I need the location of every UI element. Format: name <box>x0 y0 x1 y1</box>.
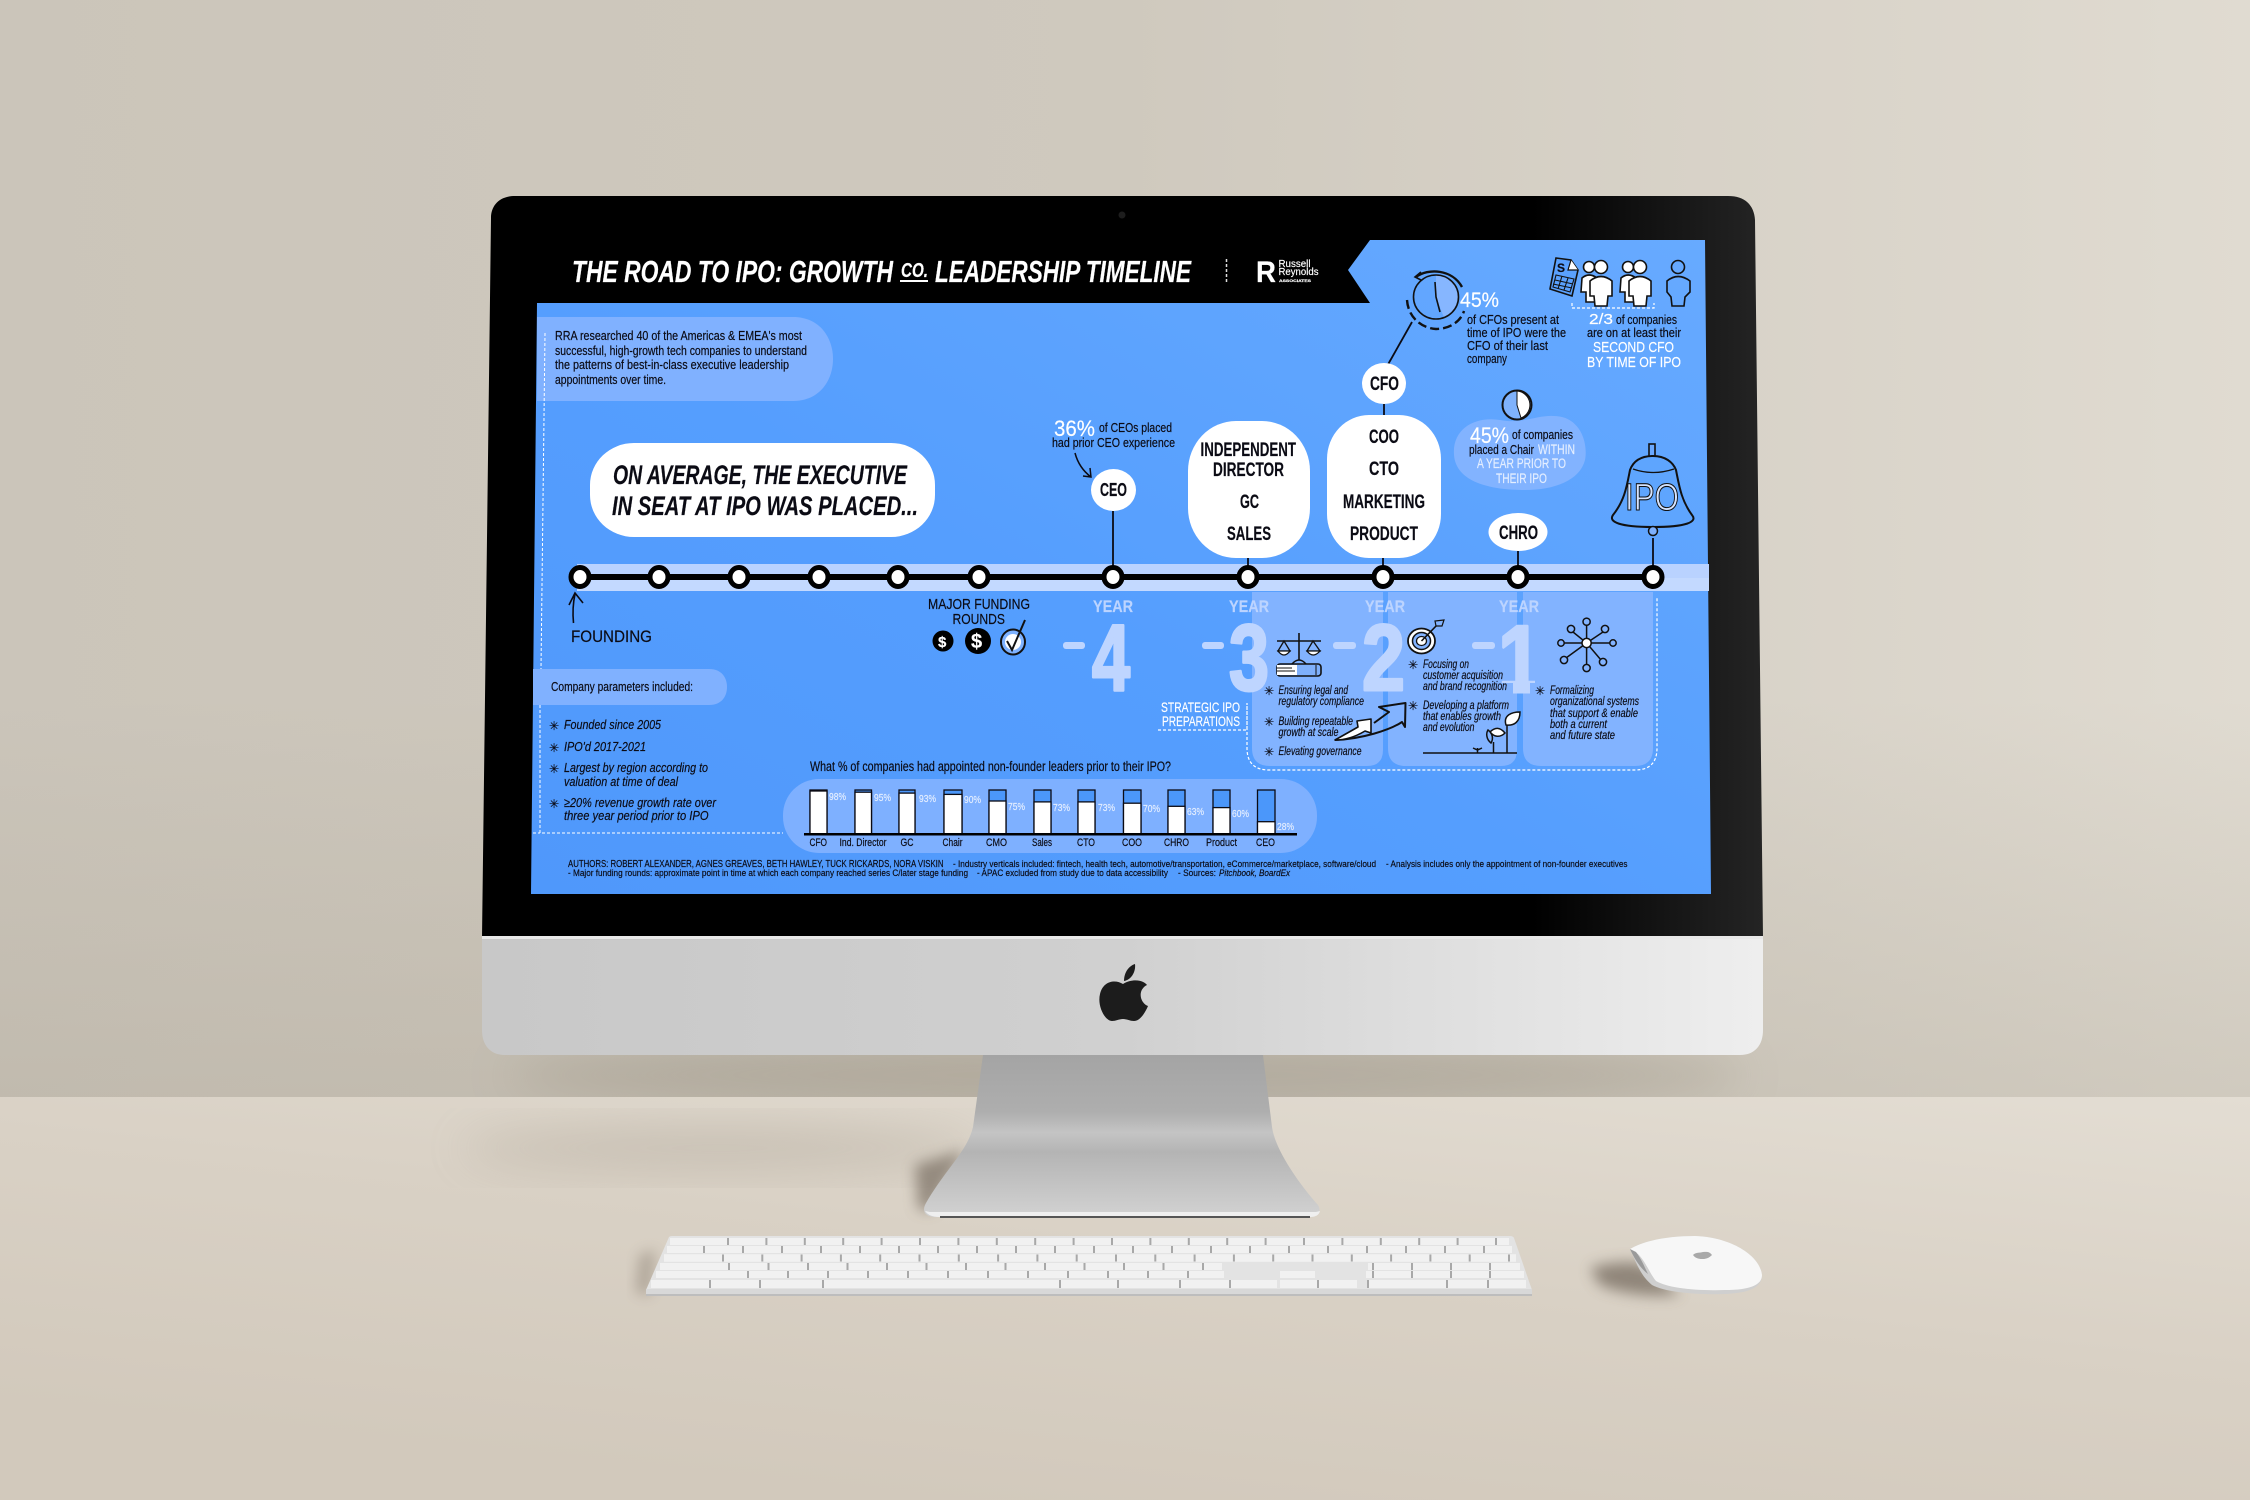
text: year -2 bullets <box>1408 658 1509 734</box>
callout: 2/3 of companies: BY TIME OF IPO <box>1587 354 1681 371</box>
text: authors and footnotes: - Industry verticals included: fintech, health tech, automotive/transportation, eCommerce/marketplace, software/cloud <box>953 859 1376 870</box>
panel: 45% chair blob: of companies <box>1512 428 1573 442</box>
text: authors and footnotes: - Analysis includes only the appointment of non-founder executives <box>1386 859 1628 870</box>
bar chart: COO <box>1122 837 1142 849</box>
year minus 2: 2 <box>1362 605 1405 710</box>
bar chart: 63% <box>1187 806 1204 818</box>
icon: first funding dollar <box>932 630 954 652</box>
text: year -2 bullets: that enables growth <box>1423 711 1501 723</box>
bar chart: 98% <box>829 791 846 803</box>
panel: study intro: appointments over time. <box>555 373 666 387</box>
text: year -1 bullets: that support & enable <box>1550 708 1638 720</box>
bar chart: 60% <box>1232 808 1249 820</box>
background: desk <box>0 1097 2250 1500</box>
panel: 45% chair blob: 45% <box>1470 423 1509 448</box>
callout: 45% of CFOs: 45% <box>1460 289 1499 312</box>
year minus 2: YEAR <box>1365 597 1405 616</box>
bubble: CEO <box>1091 469 1136 511</box>
year minus 3: 3 <box>1229 605 1269 710</box>
bar chart: Sales <box>1032 837 1052 849</box>
bar chart: 73% <box>1053 802 1070 814</box>
panel: company parameters <box>533 669 727 705</box>
text: year -1 bullets: and future state <box>1550 730 1615 742</box>
panel: 45% chair blob: A YEAR PRIOR TO <box>1477 456 1566 471</box>
callout: 45% of CFOs: of CFOs present at <box>1467 313 1559 327</box>
logo: Russell Reynolds Associates: ASSOCIATES <box>1279 278 1311 283</box>
icon: single person outline <box>1667 260 1690 306</box>
text: authors and footnotes: AUTHORS: ROBERT ALEXANDER, AGNES GREAVES, BETH HAWLEY, TUCK RICKARDS, NORA VISKIN <box>568 859 944 870</box>
bar chart: 90% <box>964 794 981 806</box>
icon: two people, first pair <box>1581 260 1612 306</box>
bubble: COO, CTO, marketing, product: CTO <box>1369 459 1399 480</box>
year minus 4: YEAR <box>1093 597 1133 616</box>
text: year -3 bullets: Ensuring legal and <box>1278 685 1348 697</box>
timeline band <box>577 564 1709 591</box>
year minus 1: 1 <box>1498 606 1542 713</box>
bubble: CFO: CFO <box>1370 374 1399 395</box>
bar chart: CFO <box>810 837 827 849</box>
text: strategic IPO preparations: PREPARATIONS <box>1162 713 1240 729</box>
icon: target <box>1408 620 1444 654</box>
icon: IPO bell: IPO <box>1625 477 1679 519</box>
monitor bezel <box>482 196 1763 939</box>
text: year -3 bullets <box>1264 684 1364 759</box>
logo: Russell Reynolds Associates: R <box>1256 256 1276 289</box>
callout: 36% of CEOs: 36% <box>1054 416 1095 441</box>
text: year -3 bullets: Elevating governance <box>1278 746 1362 758</box>
text: company parameter list <box>549 717 717 823</box>
bubble: CFO <box>1362 363 1406 404</box>
text: year -3 bullets: ✳ <box>1264 715 1274 729</box>
bar chart: Ind. Director <box>840 837 887 849</box>
text: company parameter list: ✳ <box>549 741 559 755</box>
callout: 45% of CFOs: company <box>1467 352 1508 366</box>
icon: two people, second pair <box>1620 260 1651 306</box>
text: year -3 bullets: ✳ <box>1264 684 1274 698</box>
callout: 45% of CFOs: time of IPO were the <box>1467 326 1566 340</box>
icon: scales and book <box>1277 633 1321 676</box>
text: founding label with arrow <box>569 593 652 646</box>
timeline with nodes <box>571 568 1662 586</box>
logo: Russell Reynolds Associates <box>1256 256 1318 289</box>
callout: on average <box>590 443 935 537</box>
text: company parameter list: Largest by region according to <box>564 760 708 775</box>
text: authors and footnotes: Pitchbook, BoardEx <box>1219 868 1291 879</box>
year minus 4 <box>1063 597 1133 710</box>
shadow of the stand on the desk <box>460 1128 980 1212</box>
title: THE ROAD TO IPO: GROWTH <box>572 254 893 289</box>
text: authors and footnotes: - Sources: <box>1178 868 1216 879</box>
text: year -1 bullets <box>1535 684 1639 742</box>
bar chart: CHRO <box>1164 837 1189 849</box>
callout: 45% of CFOs: CFO of their last <box>1467 339 1548 353</box>
bubble: COO, CTO, marketing, product: COO <box>1369 427 1399 448</box>
year minus 1 <box>1472 600 1539 694</box>
text: year -2 bullets: ✳ <box>1408 658 1418 672</box>
text: year -2 bullets: and evolution <box>1423 722 1474 734</box>
text: company parameter list: three year period prior to IPO <box>564 808 708 823</box>
callout: 36% of CEOs: had prior CEO experience <box>1052 435 1175 450</box>
text: authors and footnotes: - Major funding rounds: approximate point in time at which each company reached series C/later stage funding <box>568 868 968 879</box>
bubble: CHRO: CHRO <box>1499 523 1538 544</box>
bar chart: 73% <box>1098 802 1115 814</box>
text: strategic IPO preparations <box>1161 699 1240 729</box>
text: year -1 bullets: both a current <box>1550 719 1608 731</box>
bar chart: CMO <box>986 837 1007 849</box>
icon: chair pie <box>1502 390 1532 420</box>
callout: 36% of CEOs: of CEOs placed <box>1099 420 1172 435</box>
icon: growing plants <box>1423 712 1520 753</box>
monitor chin <box>482 938 1763 1055</box>
text: chart title: What % of companies had appointed non-founder leaders prior to their IPO? <box>810 759 1171 774</box>
bubble: independent director, GC, sales: GC <box>1240 492 1259 513</box>
bubble: CHRO <box>1488 513 1548 551</box>
logo: Russell Reynolds Associates: Reynolds <box>1278 266 1318 278</box>
background: wall <box>0 0 2250 1111</box>
callout: 2/3 of companies: of companies <box>1616 313 1677 327</box>
text: year -2 bullets: and brand recognition <box>1423 681 1507 693</box>
logo: Russell Reynolds Associates: Russell <box>1278 258 1310 270</box>
icon: spreadsheet document: S <box>1557 261 1565 275</box>
bubble: COO, CTO, marketing, product: PRODUCT <box>1350 524 1418 545</box>
bar chart: Chair <box>942 837 963 849</box>
bar chart: 70% <box>1143 803 1160 815</box>
callout: 36% of CEOs <box>1052 416 1175 477</box>
text: year -1 bullets: organizational systems <box>1550 696 1639 708</box>
panel: study intro: the patterns of best-in-class executive leadership <box>555 358 789 372</box>
text: strategic IPO preparations: STRATEGIC IPO <box>1161 699 1240 715</box>
icon: clock with 45% wedge <box>1407 271 1464 329</box>
bar chart <box>783 779 1317 853</box>
panel: 45% chair blob: WITHIN <box>1538 442 1575 457</box>
panel: company parameters: Company parameters included: <box>551 680 693 694</box>
text: authors and footnotes: - APAC excluded from study due to data accessibility <box>977 868 1168 879</box>
connector stems <box>1113 322 1653 570</box>
year minus 3: YEAR <box>1229 597 1269 616</box>
callout: 2/3 of companies: 2/3 <box>1589 311 1613 328</box>
callout: on average: ON AVERAGE, THE EXECUTIVE <box>613 460 908 490</box>
year minus 1: YEAR <box>1499 597 1539 616</box>
text: year -2 bullets: customer acquisition <box>1423 670 1503 682</box>
icon: spreadsheet document <box>1550 258 1578 296</box>
bar chart: 95% <box>874 792 891 804</box>
callout: 2/3 of companies <box>1587 311 1681 371</box>
text: major funding rounds: ROUNDS <box>952 611 1005 628</box>
panel: 45% chair blob: placed a Chair <box>1469 443 1534 457</box>
text: year -3 bullets: regulatory compliance <box>1278 696 1364 708</box>
text: year -2 bullets: Developing a platform <box>1423 700 1509 712</box>
icon: second funding dollar: $ <box>971 631 982 653</box>
icon: growth arrows <box>1335 703 1406 740</box>
panel: 45% chair blob: THEIR IPO <box>1496 471 1547 486</box>
bar chart: 28% <box>1277 821 1294 833</box>
year minus 2 <box>1333 597 1405 710</box>
panel: study intro: RRA researched 40 of the Americas & EMEA's most <box>555 329 802 343</box>
year minus 4: 4 <box>1092 605 1130 710</box>
bar chart: GC <box>900 837 914 849</box>
panels: year columns <box>1252 592 1653 766</box>
text: year -3 bullets: growth at scale <box>1278 727 1338 739</box>
text: year -3 bullets: Building repeatable <box>1278 716 1353 728</box>
text: major funding rounds <box>928 596 1030 628</box>
bar chart: CEO <box>1256 837 1275 849</box>
text: company parameter list: ✳ <box>549 797 559 811</box>
text: company parameter list: IPO'd 2017-2021 <box>564 739 646 754</box>
icon: apple logo <box>1099 964 1148 1021</box>
icon: funding check mark <box>1001 620 1025 654</box>
bubble: independent director, GC, sales: INDEPENDENT <box>1200 440 1296 461</box>
keyboard <box>646 1236 1532 1296</box>
mouse <box>1630 1236 1762 1294</box>
bubble: independent director, GC, sales <box>1188 421 1310 558</box>
icon: IPO bell <box>1612 444 1693 536</box>
bubble: COO, CTO, marketing, product: MARKETING <box>1343 492 1425 513</box>
text: year -2 bullets: ✳ <box>1408 699 1418 713</box>
panel: study intro <box>537 317 833 669</box>
text: major funding rounds: MAJOR FUNDING <box>928 596 1030 613</box>
text: authors and footnotes <box>568 859 1628 879</box>
monitor stand <box>924 1055 1320 1218</box>
text: company parameter list: ✳ <box>549 762 559 776</box>
bubble: CEO: CEO <box>1100 480 1127 500</box>
keyboard shadow <box>636 1250 655 1296</box>
callout: 2/3 of companies: SECOND CFO <box>1593 339 1674 356</box>
text: year -1 bullets: Formalizing <box>1550 685 1594 697</box>
panel: 45% chair blob <box>1454 416 1586 490</box>
text: year -2 bullets: Focusing on <box>1423 659 1469 671</box>
callout: 2/3 of companies: are on at least their <box>1587 326 1681 340</box>
text: founding label with arrow: FOUNDING <box>571 627 652 646</box>
title: CO. <box>901 260 928 282</box>
text: year -3 bullets: ✳ <box>1264 745 1274 759</box>
year minus 3 <box>1202 597 1269 710</box>
bar chart: CTO <box>1077 837 1095 849</box>
bar chart: Product <box>1206 837 1237 849</box>
bubble: independent director, GC, sales: SALES <box>1227 524 1271 545</box>
bar chart: 75% <box>1008 801 1025 813</box>
icon: second funding dollar <box>965 628 991 654</box>
title: LEADERSHIP TIMELINE <box>935 254 1192 289</box>
bubble: COO, CTO, marketing, product <box>1327 415 1441 558</box>
text: year -1 bullets: ✳ <box>1535 684 1545 698</box>
bubble: independent director, GC, sales: DIRECTOR <box>1213 460 1284 481</box>
text: company parameter list: ≥20% revenue growth rate over <box>564 795 717 810</box>
panel: infographic screen background <box>531 240 1711 894</box>
text: company parameter list: valuation at time of deal <box>564 774 679 789</box>
callout: 45% of CFOs <box>1460 289 1566 366</box>
text: company parameter list: ✳ <box>549 719 559 733</box>
panel: study intro: successful, high-growth tech companies to understand <box>555 344 807 358</box>
text: company parameter list: Founded since 2005 <box>564 717 662 732</box>
icon: network hub <box>1558 618 1616 672</box>
mouse shadow <box>1590 1262 1680 1296</box>
bar chart: 93% <box>919 793 936 805</box>
icon: first funding dollar: $ <box>938 634 947 651</box>
callout: on average: IN SEAT AT IPO WAS PLACED... <box>612 491 918 521</box>
